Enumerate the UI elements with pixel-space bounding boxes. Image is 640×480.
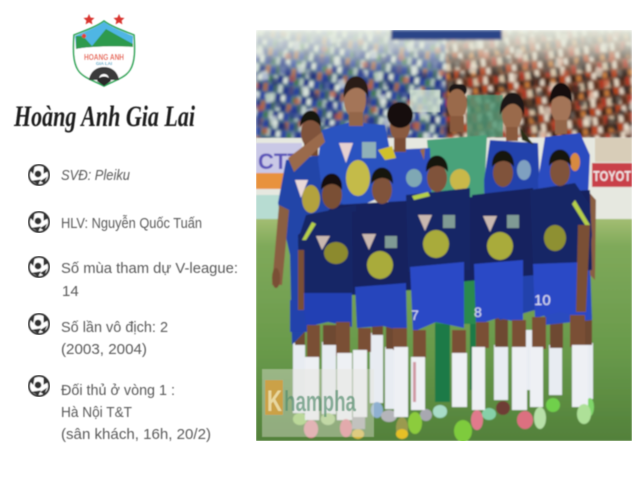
icon: left star [84,14,94,24]
socks back row [293,330,593,414]
player 5 [484,92,540,320]
info item: stadium [29,165,131,185]
player 3 [378,102,432,215]
stadium text: SVĐ: Pleiku [61,167,131,184]
shirt numbers [410,306,482,322]
seasons text: Số mùa tham dự V-league: [61,260,238,277]
titles years: (2003, 2004) [61,341,147,358]
advertising boards [256,90,632,220]
back row boots [293,398,594,425]
titles text: Số lần vô địch: 2 [61,319,168,336]
opponent label: Đối thủ ở vòng 1 : [61,382,175,399]
player front 5: 10 [534,292,551,309]
icon: right star [114,14,124,24]
front row backing [298,189,593,282]
pitch [256,219,632,441]
watermark: Khampha: K [267,385,282,418]
watermark: Khampha [262,369,374,437]
shield [73,21,135,86]
shirt numbers: 8 [474,304,482,320]
shirt numbers: 7 [411,307,419,323]
back row players [272,76,596,425]
team photo [256,30,632,442]
player front 1 [298,174,358,438]
player front 4 [471,150,536,430]
player 2 [288,76,392,210]
crest ball [89,67,119,80]
watermark: Khampha: hampha [284,386,357,418]
goalkeeper [427,84,487,417]
title: Hoàng Anh Gia Lai [13,100,195,133]
crest name: HOANG ANH [84,52,124,62]
legs back row [294,317,593,350]
crowd stands [256,30,632,142]
player 6 [538,83,596,325]
info item: coach [29,212,202,232]
icon: football [29,165,49,185]
player front 5 [530,150,592,429]
icon: football [29,314,49,334]
crest subtitle: GIA LAI [96,61,112,66]
shield sky and mountains [75,22,133,49]
opponent name: Hà Nội T&T [61,404,132,421]
coach text: HLV: Nguyễn Quốc Tuấn [61,215,202,232]
match details: (sân khách, 16h, 20/2) [61,426,211,443]
icon: football [29,257,49,277]
info item: titles [29,314,168,358]
info item: first opponent [29,376,211,443]
info item: seasons [29,257,238,300]
seasons value: 14 [62,283,79,300]
icon: football [29,212,49,232]
player front 3 [406,156,472,442]
player front 2 [352,168,416,439]
icon: team crest [73,14,135,86]
icon: football [29,376,49,396]
front row players [298,150,592,442]
advertising boards: CTT [258,149,301,174]
player 1 [272,110,345,345]
